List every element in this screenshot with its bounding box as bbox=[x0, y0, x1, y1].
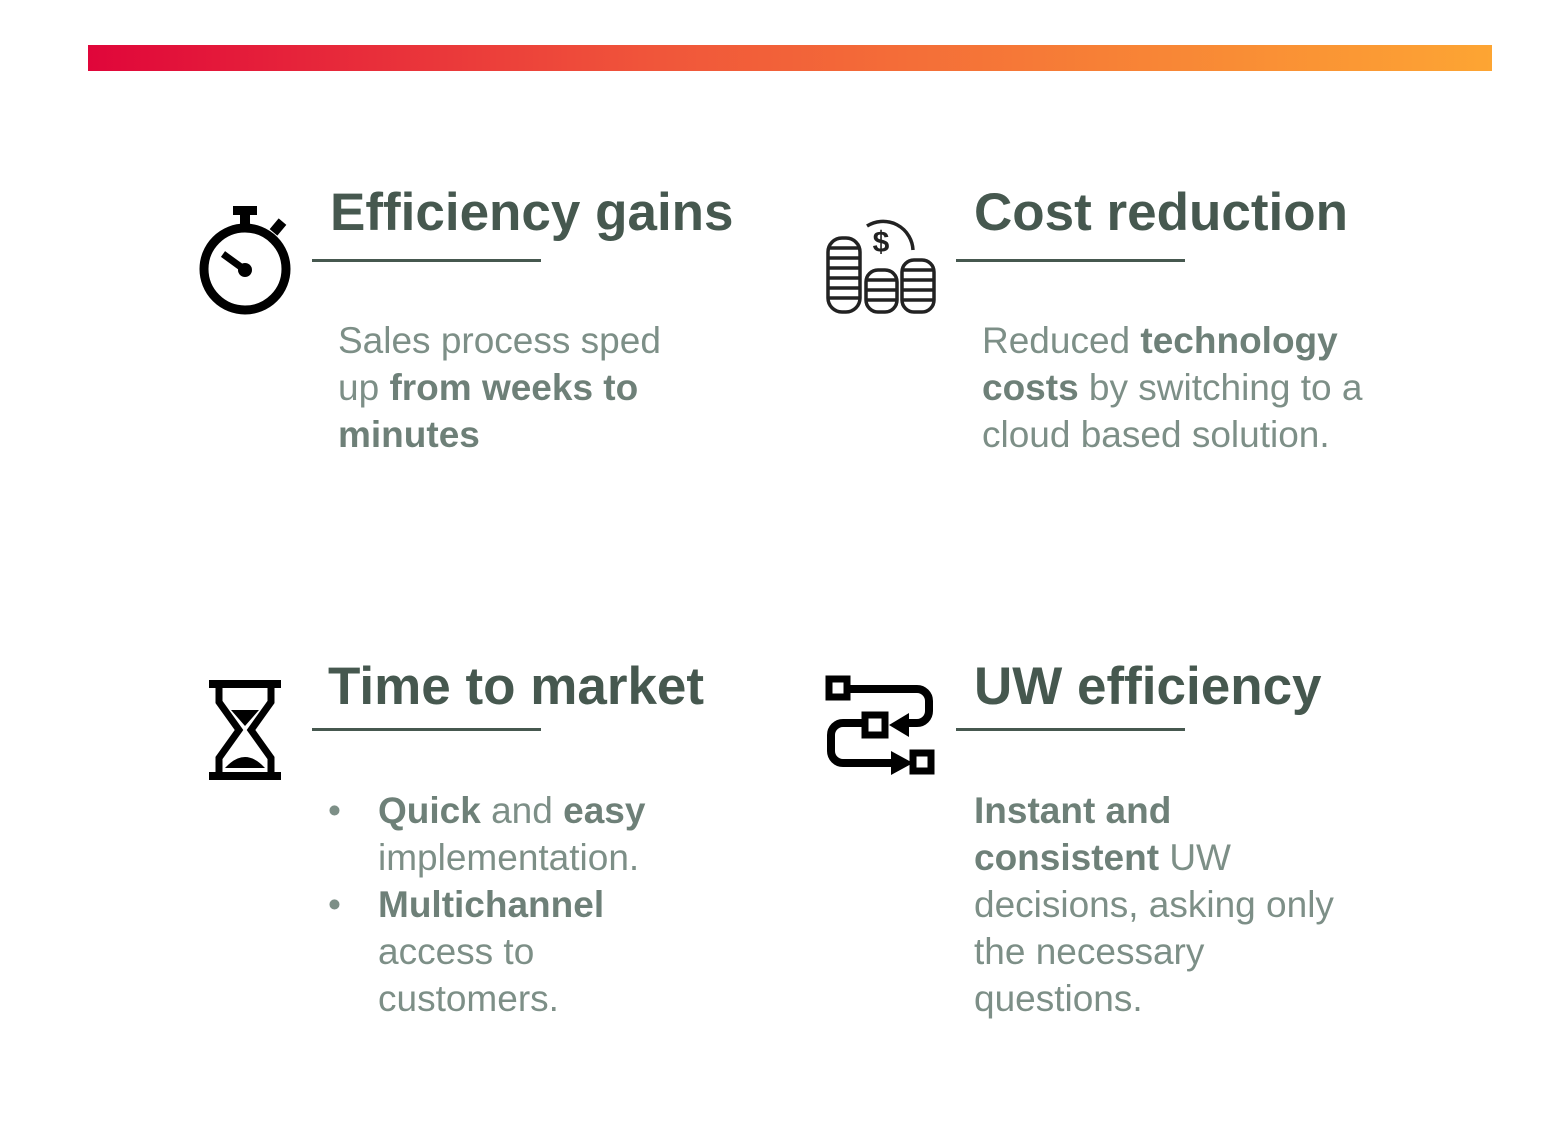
panel: UW efficiency bbox=[826, 657, 1334, 1019]
bullet list: Multichannel bbox=[378, 884, 604, 925]
text block: decisions, asking only bbox=[974, 884, 1334, 925]
icon: hourglass bbox=[209, 680, 281, 780]
text block: Instant and bbox=[974, 790, 1171, 831]
bullet list: access to bbox=[378, 931, 534, 972]
text block: cloud based solution. bbox=[982, 414, 1330, 455]
icon: coins with dollar: $ bbox=[873, 226, 890, 259]
panel: time to market bbox=[209, 657, 704, 1019]
text block bbox=[974, 790, 1334, 1019]
top gradient bar bbox=[88, 45, 1492, 71]
text block: Reduced technology bbox=[982, 320, 1338, 361]
icon: stopwatch bbox=[200, 206, 290, 314]
bullet list: customers. bbox=[378, 978, 559, 1019]
bullet list bbox=[328, 790, 646, 1019]
bullet list: • bbox=[328, 884, 341, 925]
text block: questions. bbox=[974, 978, 1143, 1019]
icon: coins with dollar bbox=[826, 220, 936, 314]
text block: up from weeks to bbox=[338, 367, 638, 408]
bullet list: implementation. bbox=[378, 837, 639, 878]
heading: UW efficiency bbox=[974, 657, 1322, 716]
text block bbox=[982, 320, 1362, 455]
heading: Efficiency gains bbox=[330, 183, 734, 242]
panel: cost reduction bbox=[826, 183, 1362, 455]
text block: Sales process sped bbox=[338, 320, 661, 361]
text block: the necessary bbox=[974, 931, 1204, 972]
bullet list: Quick and easy bbox=[378, 790, 645, 831]
heading: Time to market bbox=[328, 657, 704, 716]
icon: workflow bbox=[826, 676, 934, 775]
text block: costs by switching to a bbox=[982, 367, 1362, 408]
heading: Cost reduction bbox=[974, 183, 1348, 242]
text block: minutes bbox=[338, 414, 480, 455]
text block: consistent UW bbox=[974, 837, 1231, 878]
text block bbox=[338, 320, 661, 455]
bullet list: • bbox=[328, 790, 341, 831]
panel: efficiency gains bbox=[200, 183, 734, 455]
